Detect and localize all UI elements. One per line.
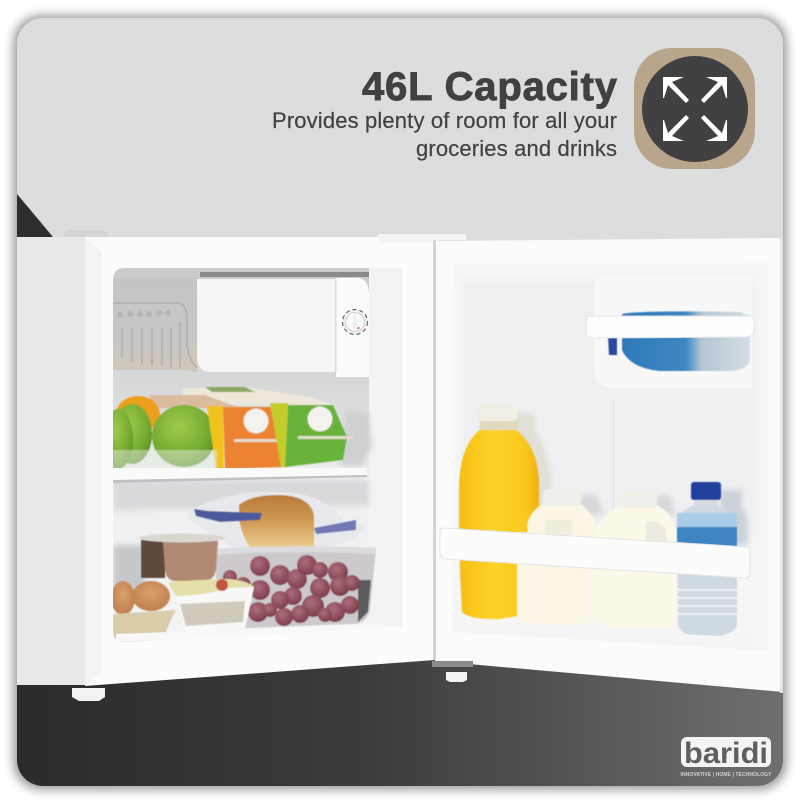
green apples [113, 404, 214, 468]
glass shelf [113, 468, 367, 480]
upper bottle [608, 311, 750, 371]
interior cavity [103, 268, 402, 650]
lower shelf food [111, 492, 376, 642]
yogurt pot [168, 578, 255, 628]
lower door bin rail [440, 528, 750, 578]
milk jug left [517, 489, 598, 625]
floor [17, 660, 783, 786]
bagged muffin [186, 492, 366, 552]
fridge front frame [85, 237, 435, 686]
door outer [435, 238, 783, 692]
lower door bin floor [454, 620, 752, 650]
freezer compartment [113, 277, 369, 377]
dark corner triangle [17, 194, 53, 237]
upper shelf food [103, 387, 372, 470]
evaporator plate [113, 277, 197, 372]
description: Provides plenty of room for all your [272, 108, 617, 133]
door inner wall [452, 263, 768, 650]
upper door rail [586, 316, 754, 338]
feet [72, 661, 473, 701]
bottle shadows [516, 410, 750, 546]
left foot [72, 688, 105, 701]
pudding cups [139, 534, 225, 581]
clear crisper tray [113, 450, 217, 470]
logo tagline: INNOVATIVE | HOME | TECHNOLOGY [680, 772, 772, 778]
description: groceries and drinks [416, 136, 617, 161]
green carton [270, 403, 353, 467]
orange juice bottle [459, 405, 539, 619]
freezer door [197, 279, 336, 372]
heading: 46L Capacity [362, 65, 618, 109]
lower shelf floor [116, 632, 166, 642]
orange carton [206, 406, 282, 468]
milk jug right [591, 491, 676, 629]
fridge side panel [17, 237, 87, 685]
control panel [336, 278, 369, 377]
back packaging [183, 388, 335, 405]
icon: expand arrows [634, 48, 755, 169]
water bottle [677, 482, 737, 637]
hinge [378, 234, 466, 241]
carton shadow [340, 408, 372, 466]
food shadow [113, 545, 145, 590]
top hinge pad [63, 230, 109, 237]
logo badge [681, 737, 771, 767]
egg carton [111, 581, 176, 642]
upper door recess [594, 276, 752, 388]
fridge [17, 230, 783, 701]
orange fruit [116, 396, 160, 432]
logo: baridi [684, 737, 768, 770]
description [272, 108, 617, 161]
door [433, 238, 783, 693]
grape tub [216, 546, 376, 628]
door hinge foot [432, 661, 473, 682]
temperature dial [342, 310, 368, 334]
